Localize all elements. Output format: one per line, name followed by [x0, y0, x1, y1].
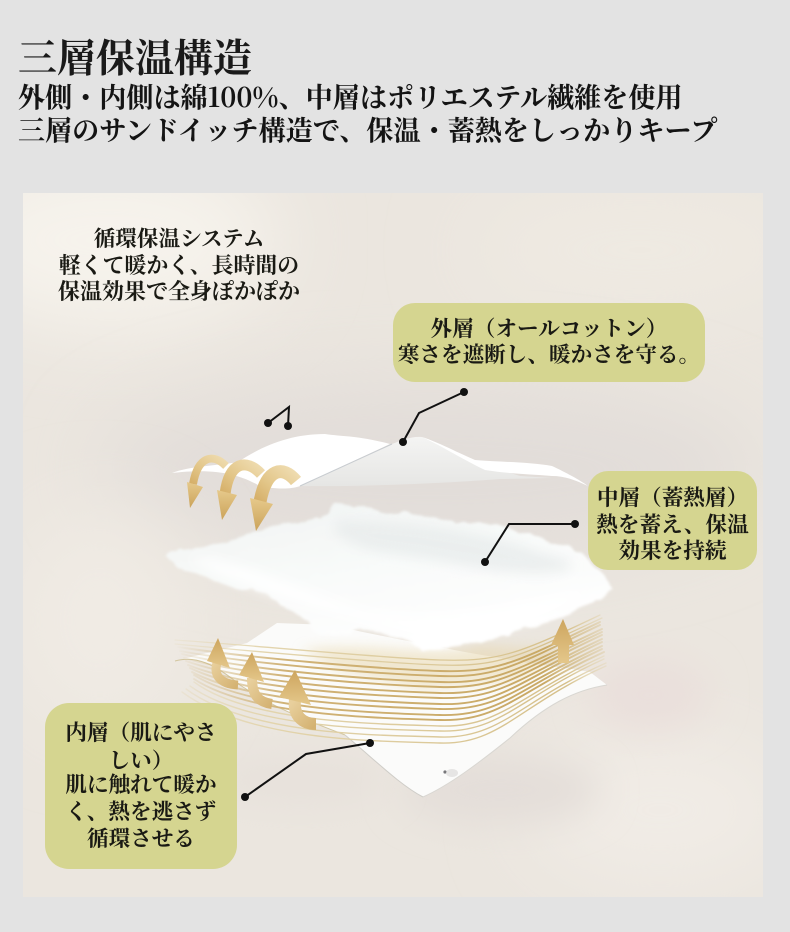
- leader: outer layer: [399, 388, 468, 446]
- callout: inner layer: く、熱を逃さず: [66, 795, 216, 826]
- top sheet: [172, 434, 588, 489]
- callout: inner layer: 肌に触れて暖か: [65, 768, 217, 799]
- callout: middle layer: 効果を持続: [618, 534, 726, 565]
- leader: middle layer: [481, 520, 579, 566]
- icon: upward arrows: [207, 619, 574, 724]
- callout: middle layer: [588, 471, 757, 570]
- callout: middle layer: 中層（蓄熱層）: [597, 481, 748, 512]
- subtitle: 三層のサンドイッチ構造で、保温・蓄熱をしっかりキープ: [18, 108, 717, 148]
- callout: inner layer: 循環させる: [87, 822, 195, 853]
- text block: circulation system: 保温効果で全身ぽかぽか: [58, 275, 300, 306]
- cotton layer: [163, 504, 612, 650]
- subtitle: 外側・内側は綿100%、中層はポリエステル繊維を使用: [18, 76, 683, 115]
- text block: circulation system: [58, 222, 300, 306]
- callout: inner layer: 内層（肌にやさ: [65, 716, 217, 747]
- warm fibre lines: [175, 615, 606, 743]
- text block: circulation system: 循環保温システム: [94, 222, 264, 253]
- text block: circulation system: 軽くて暖かく、長時間の: [59, 249, 299, 280]
- leader: inner layer: [241, 739, 374, 801]
- icon: downward arrows: [187, 459, 296, 531]
- callout: outer layer: 寒さを遮断し、暖かさを守る。: [398, 338, 700, 369]
- bottom sheet: [175, 623, 607, 797]
- panel: layered diagram: [23, 193, 763, 897]
- leader: stray mark: [264, 407, 292, 430]
- callout: outer layer: 外層（オールコットン）: [431, 312, 667, 343]
- callout: inner layer: [45, 703, 237, 869]
- title: 三層保温構造: [18, 28, 252, 84]
- callout: inner layer: しい）: [109, 744, 173, 775]
- callout: middle layer: 熱を蓄え、保温: [596, 508, 749, 539]
- callout: outer layer: [393, 303, 705, 382]
- subtitle: [18, 76, 718, 148]
